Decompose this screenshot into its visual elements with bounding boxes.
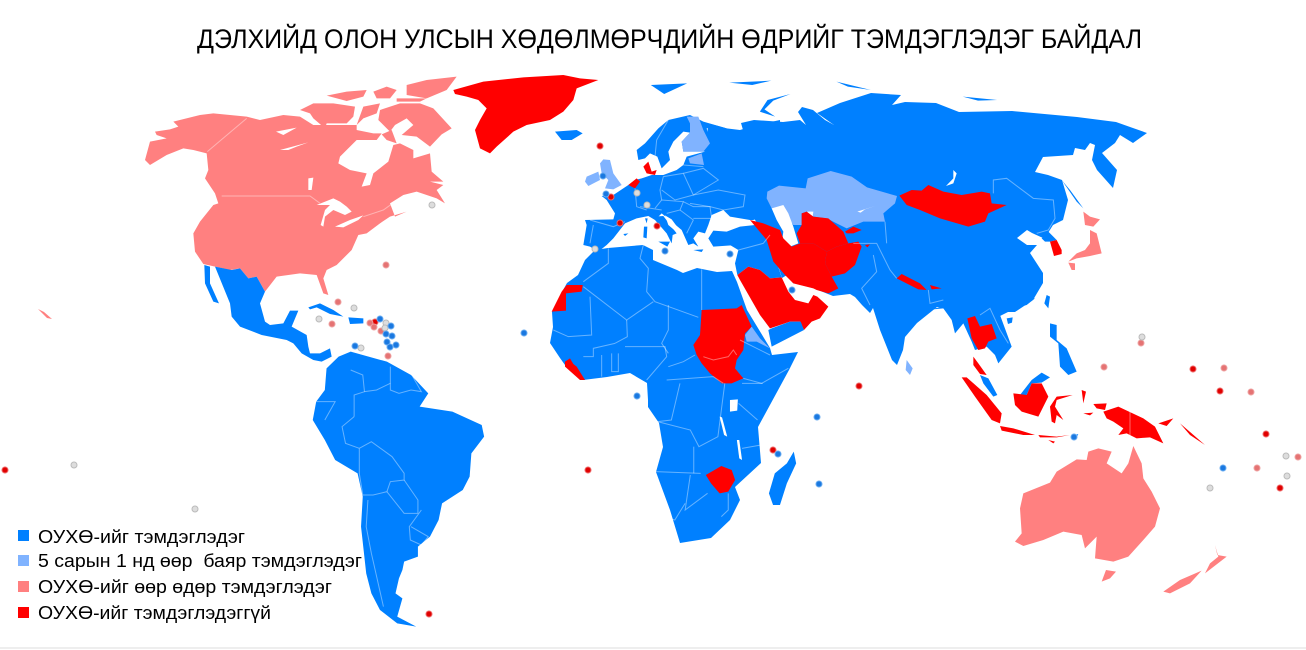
Nepal [897, 274, 927, 290]
Timor-Leste [1072, 434, 1078, 440]
Great Lakes [276, 128, 363, 227]
South Korea [1050, 240, 1062, 256]
small island markers [2, 143, 1301, 617]
Mediterranean islands [623, 218, 703, 252]
legend [18, 527, 362, 623]
legend: other holiday on May 1: 5 сарын 1 нд өөр баяр тэмдэглэдэг [38, 551, 362, 571]
Canada and USA [145, 113, 445, 295]
Caspian Sea [772, 205, 798, 247]
Baikal [946, 170, 957, 186]
Europe borders [590, 120, 745, 243]
Turkey [708, 225, 780, 247]
Mexico and Central America [215, 267, 332, 362]
map: Asia [651, 81, 1147, 365]
Sudan and South Sudan [693, 305, 752, 383]
Malaysia, Borneo [1020, 373, 1050, 395]
Zimbabwe [706, 466, 735, 493]
Finland [682, 117, 710, 152]
Japan [1068, 212, 1102, 270]
Indochina [927, 298, 1035, 363]
Hawaii [38, 309, 52, 319]
Malay peninsula [980, 375, 997, 397]
mainland Europe [583, 120, 780, 252]
Baja California [204, 265, 219, 303]
Taiwan [1044, 295, 1050, 308]
Estonia [688, 153, 704, 165]
Philippines [1050, 323, 1077, 375]
map: South America and southern Africa [313, 352, 796, 627]
Yemen [768, 322, 804, 347]
Italy [653, 216, 677, 243]
Eritrea [745, 327, 770, 348]
map: East Asia [899, 170, 1102, 308]
map: Europe [583, 115, 780, 252]
Sierra Leone and Liberia [565, 358, 585, 380]
Sakhalin [1062, 180, 1083, 208]
Arctic islands of Russia [651, 81, 997, 117]
Tasmania [1102, 570, 1116, 582]
South America borders [316, 367, 428, 607]
Canadian Arctic islands [300, 77, 457, 147]
Mongolia [899, 185, 1007, 227]
borders [553, 245, 788, 383]
Denmark [643, 162, 657, 175]
Cuba [308, 303, 343, 317]
Thai peninsula [973, 357, 987, 375]
Balkhash [857, 206, 875, 213]
Indochina borders [980, 308, 1008, 343]
legend: does not celebrate: ОУХӨ-ийг тэмдэглэдэггүй [38, 603, 271, 623]
North Korea [1042, 232, 1057, 242]
Australia [1015, 446, 1160, 562]
Indonesia and Papua New Guinea [962, 377, 1205, 445]
Tajikistan [845, 227, 862, 233]
title: ДЭЛХИЙД ОЛОН УЛСЫН ХӨДӨЛМӨРЧДИЙН ӨДРИЙГ ТЭМДЭГЛЭДЭГ БАЙДАЛ [197, 23, 1142, 54]
West and North Africa details [552, 245, 788, 383]
Levant and Iraq [730, 235, 782, 278]
Aral Sea [807, 212, 813, 217]
Iceland [555, 130, 583, 140]
legend: celebrates: ОУХӨ-ийг тэмдэглэдэг [38, 527, 245, 547]
Netherlands [628, 178, 640, 188]
map: Middle East and South Asia [730, 171, 943, 375]
Arabia [737, 267, 828, 330]
map: North America and Greenland [145, 75, 598, 362]
Madagascar [769, 452, 796, 505]
African lakes [720, 399, 742, 460]
map: South-East Asia and Oceania [927, 298, 1227, 593]
Hispaniola [348, 317, 363, 324]
Afghanistan [825, 242, 862, 277]
Thailand [967, 316, 997, 350]
Adriatic Sea [665, 215, 684, 236]
Ireland [585, 172, 600, 186]
Sri Lanka [906, 360, 913, 375]
Hainan [1007, 317, 1013, 324]
United Kingdom [600, 159, 622, 189]
China borders [993, 178, 1055, 233]
Greenland [453, 75, 598, 153]
legend: different day: ОУХӨ-ийг өөр өдөр тэмдэглэдэг [38, 577, 332, 597]
Russia, China, India and neighbours [735, 93, 1147, 365]
Central Asia [797, 212, 848, 252]
Bhutan [930, 285, 942, 289]
borders [738, 222, 943, 305]
map: Africa [550, 245, 798, 543]
Caucasus and Iran [750, 220, 838, 293]
Scandinavia [637, 115, 727, 168]
New Zealand [1163, 545, 1227, 593]
Kazakhstan [767, 171, 897, 228]
Western Sahara [552, 285, 583, 312]
South America [313, 352, 484, 627]
Southern Africa borders [656, 383, 763, 520]
